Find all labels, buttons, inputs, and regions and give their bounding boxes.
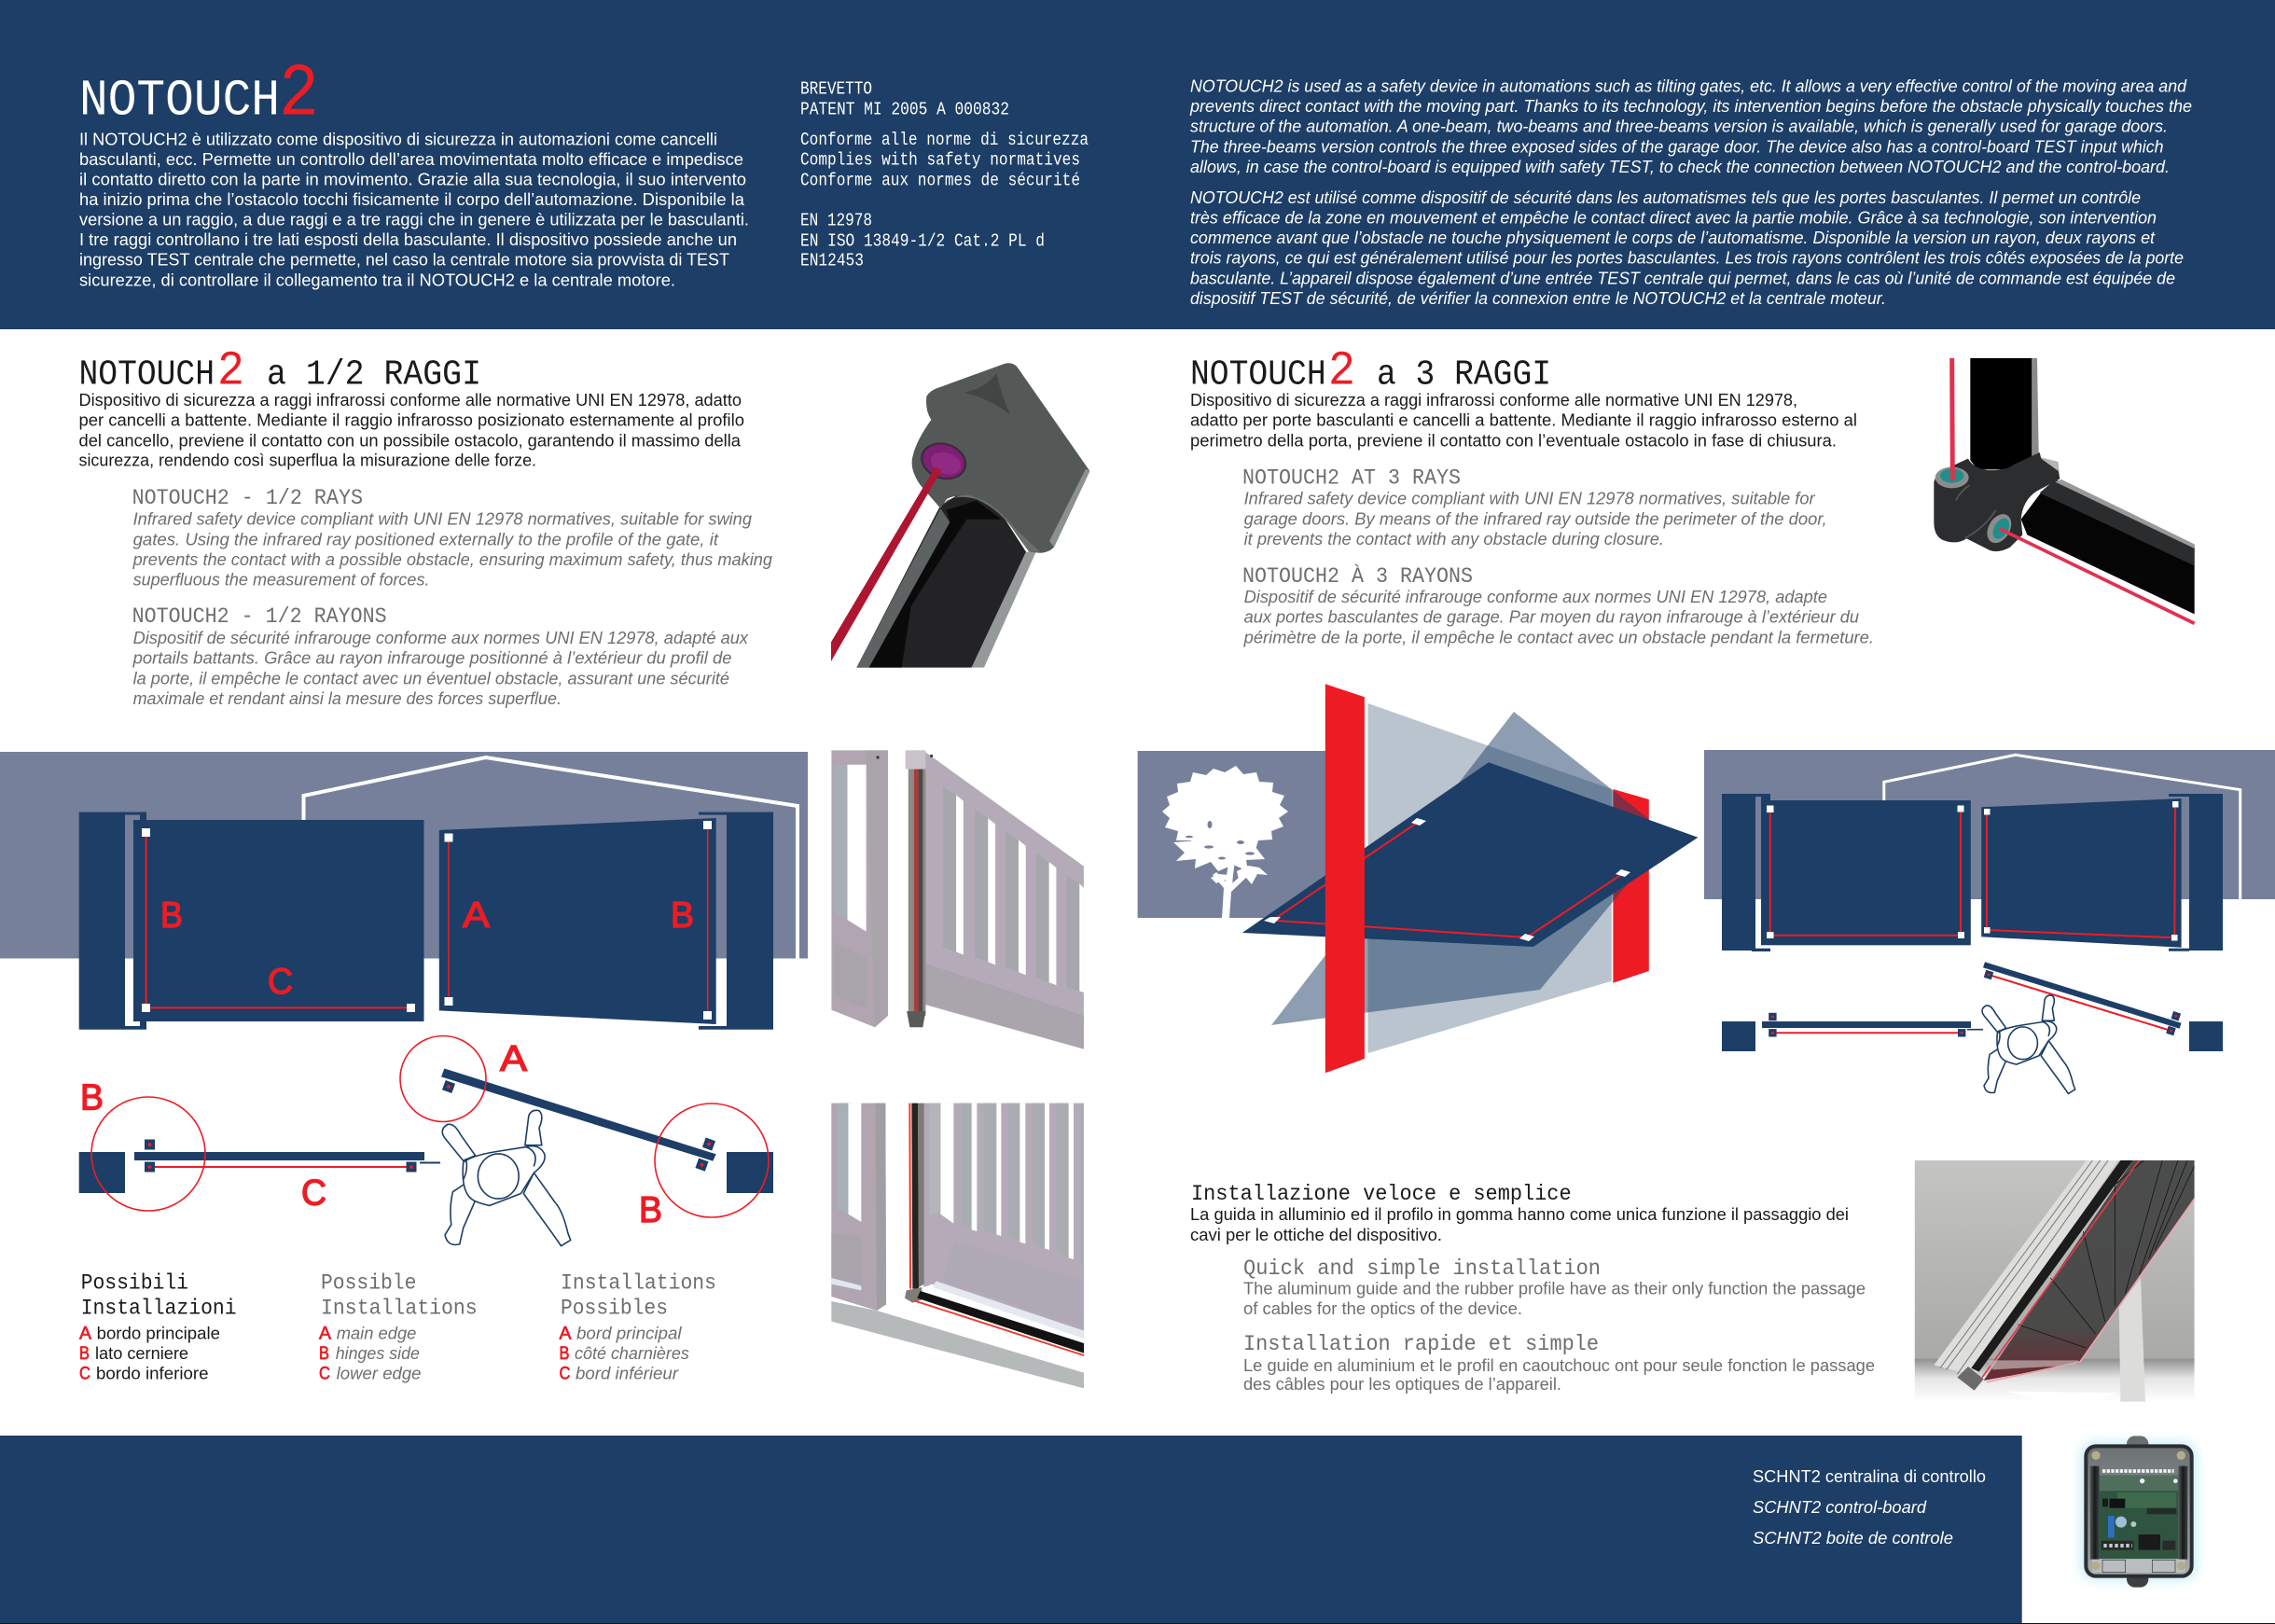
door leaf [1242, 762, 1698, 947]
text block: 1/2 rays French: Dispositif de sécurité infrarouge conforme aux normes UNI EN 12978, adapté aux [133, 628, 749, 647]
highlight circles [91, 1035, 769, 1217]
text block: 3 rays English: garage doors. By means of the infrared ray outside the perimeter of the door, [1244, 508, 1827, 528]
intro text: French [1190, 187, 2184, 308]
plan letters: B [80, 1078, 104, 1117]
intro text: English: structure of the automation. A one-beam, two-beams and three-beams version is available, which is generally used for garage doors. [1190, 117, 2168, 136]
control-board captions: SCHNT2 boite de controle [1753, 1528, 1953, 1548]
patent and norms text: Conforme aux normes de sécurité [800, 170, 1080, 190]
heading: NOTOUCH2 a 3 raggi: 2 [1328, 344, 1355, 399]
plan sensors [145, 1080, 715, 1172]
legend: French: côté charnières [575, 1343, 689, 1363]
text block: quick installation French: des câbles pour les optiques de l’appareil. [1243, 1374, 1561, 1394]
legend: English: Possible [321, 1271, 416, 1296]
legend: Italian: bordo principale [97, 1324, 220, 1343]
text block: 1/2 rays English: prevents the contact with a possible obstacle, ensuring maximum safety, thus making [132, 549, 773, 569]
legend: English: C [319, 1365, 330, 1384]
intro text: French: commence avant que l’obstacle ne touche physiquement le corps de l’automatisme. Disponible la version un rayon, deux rayons et [1190, 228, 2156, 247]
infrared beams [1952, 358, 2195, 623]
plan letters: B [639, 1190, 662, 1230]
patent and norms text: Conforme alle norme di sicurezza [800, 130, 1089, 150]
text block: 1/2 rays Italian [78, 390, 744, 470]
legend: English: B [319, 1344, 329, 1364]
text block: 3 rays French: aux portes basculantes de garage. Par moyen du rayon infrarouge à l’extérieur du [1244, 607, 1859, 627]
intro text: English: prevents direct contact with the moving part. Thanks to its technology, its intervention begins before the obstacle physically touches the [1189, 96, 2192, 116]
left post [79, 812, 146, 1030]
heading: NOTOUCH2 a 1/2 raggi [78, 344, 481, 399]
gate diagram: 1/2 rays plan view [79, 1035, 773, 1246]
far red post [1613, 789, 1649, 983]
intro text: Italian: I tre raggi controllano i tre lati esposti della basculante. Il dispositivo possiede anche un [79, 229, 737, 249]
legend: English: Installations [321, 1296, 478, 1320]
text block: 3 rays Italian [1190, 390, 1857, 450]
intro text: Italian: il contatto diretto con la parte in movimento. Grazie alla sua tecnologia, il suo intervento [79, 170, 746, 188]
text block: 1/2 rays English [132, 486, 773, 590]
text block: 1/2 rays English: Infrared safety device compliant with UNI EN 12978 normatives, suitable for swing [133, 509, 753, 529]
text block: quick installation French [1243, 1332, 1875, 1394]
text block: 3 rays Italian: adatto per porte basculanti e cancelli a battente. Mediante il raggio infrarosso esterno al [1190, 410, 1857, 430]
elevation letters: C [268, 962, 293, 1002]
patent and norms text [800, 79, 1089, 271]
right leaf rays A and B [444, 821, 712, 1020]
patent and norms text: EN12453 [800, 250, 864, 271]
heading: NOTOUCH2 a 1/2 raggi: NOTOUCH [78, 355, 215, 396]
legend: French [560, 1271, 716, 1384]
legend: Italian: bordo inferiore [96, 1364, 209, 1383]
text block: 3 rays English: NOTOUCH2 AT 3 RAYS [1242, 465, 1461, 490]
gate diagram: 1/2 rays elevation [0, 752, 808, 1030]
text block: quick installation English: of cables for the optics of the device. [1243, 1298, 1522, 1318]
product render: three-ray corner sensor [1934, 358, 2195, 623]
intro text: English: NOTOUCH2 is used as a safety device in automations such as tilting gates, etc. It allows a very effective control of the moving area and [1190, 76, 2187, 96]
text block: quick installation Italian: cavi per le ottiche del dispositivo. [1190, 1225, 1442, 1244]
side wall panel [1367, 703, 1612, 1053]
text block: 3 rays French: Dispositif de sécurité infrarouge conforme aux normes UNI EN 12978, adapte [1244, 587, 1827, 606]
legend: French: A [560, 1325, 572, 1344]
door leaves [1761, 800, 1971, 945]
plan letters [80, 1039, 662, 1230]
intro text: Italian: basculanti, ecc. Permette un controllo dell’area movimentata molto efficace e impedisce [79, 149, 743, 169]
text block: 1/2 rays French: NOTOUCH2 - 1/2 RAYONS [132, 604, 387, 629]
left leaf rays B and C [142, 828, 415, 1012]
intro text: Italian: sicurezze, di controllare il collegamento tra il NOTOUCH2 e la centrale motore. [79, 270, 675, 289]
control-board captions [1753, 1466, 1986, 1548]
posts [1722, 794, 2223, 951]
legend: French: bord principal [576, 1324, 682, 1343]
header band [0, 0, 2275, 329]
legend: English: A [319, 1325, 331, 1344]
patent and norms text: BREVETTO [800, 79, 872, 100]
legend: French: B [560, 1344, 569, 1364]
elevation letters: A [463, 895, 490, 936]
intro text: French: dispositif TEST de sécurité, de vérifier la connexion entre le NOTOUCH2 et la centrale moteur. [1190, 288, 1886, 308]
infrared beam [831, 467, 941, 661]
intro text: Italian: Il NOTOUCH2 è utilizzato come dispositivo di sicurezza in automazioni come cancelli [79, 129, 717, 148]
legend: Italian: Possibili [81, 1271, 188, 1296]
text block: 1/2 rays French: la porte, il empêche le contact avec un éventuel obstacle, assurant une sécurité [133, 668, 729, 687]
sensors [1264, 818, 1630, 941]
patent and norms text: EN ISO 13849-1/2 Cat.2 PL d [800, 230, 1045, 251]
text block: 1/2 rays Italian: Dispositivo di sicurezza a raggi infrarossi conforme alle normative UNI EN 12978, adatto [78, 390, 742, 409]
intro text: English [1189, 76, 2192, 176]
text block: 3 rays Italian: perimetro della porta, previene il contatto con l’eventuale ostacolo in fase di chiusura. [1190, 430, 1837, 450]
product render: sensor on swing gate [831, 363, 1089, 668]
intro text: Italian: ingresso TEST centrale che permette, nel caso la centrale motore sia provvista di TEST [79, 250, 729, 270]
left gate leaf [133, 820, 423, 1021]
text block: 1/2 rays English: superfluous the measurement of forces. [133, 570, 429, 590]
garage door 3D diagram [1242, 684, 1698, 1073]
text block: 3 rays English: Infrared safety device compliant with UNI EN 12978 normatives, suitable for [1244, 489, 1815, 508]
heading: NOTOUCH2 a 1/2 raggi: a 1/2 RAGGI [267, 355, 481, 396]
intro text: Italian [79, 129, 749, 289]
plan letters: A [500, 1039, 527, 1079]
photo: gate with lower ray [831, 1103, 1084, 1388]
plan letters: C [301, 1173, 326, 1214]
text block: quick installation English: The aluminum guide and the rubber profile have as their only function the passage [1243, 1278, 1866, 1298]
legend: Italian [79, 1271, 237, 1384]
photo: gate with vertical ray [831, 750, 1084, 1049]
legend: Italian: A [79, 1325, 91, 1344]
legend: French: C [560, 1365, 571, 1384]
near red post [1325, 684, 1365, 1073]
text block: 1/2 rays Italian: sicurezza, rendendo così superflua la misurazione delle forze. [78, 451, 536, 470]
text block: quick installation Italian: Installazione veloce e semplice [1191, 1182, 1572, 1206]
main title [79, 53, 319, 138]
text block: 3 rays English [1242, 465, 1827, 548]
text block: quick installation English: Quick and simple installation [1243, 1256, 1601, 1281]
text block: 3 rays French: NOTOUCH2 À 3 RAYONS [1242, 563, 1473, 589]
legend: French: bord inférieur [576, 1364, 679, 1383]
text block: 1/2 rays French: maximale et rendant ainsi la mesure des forces superflue. [133, 688, 562, 708]
text block: 3 rays Italian: Dispositivo di sicurezza a raggi infrarossi conforme alle normative UNI EN 12978, [1190, 390, 1797, 409]
person top view [1982, 995, 2075, 1093]
three rays [1272, 822, 1623, 937]
intro text: French: NOTOUCH2 est utilisé comme dispositif de sécurité dans les automatismes tels que les portes basculantes. Il permet un contrôle [1190, 187, 2141, 207]
patent and norms text: EN 12978 [800, 211, 872, 231]
lens [916, 437, 971, 485]
intro text: French: trois rayons, ce qui est généralement utilisé pour les portes basculantes. Les trois rayons contrôlent les trois côtés exposées de la porte [1190, 248, 2184, 268]
legend: Italian: C [79, 1365, 90, 1384]
garage door diagram: elevation [1704, 750, 2275, 951]
photo: SCHNT2 control board [2080, 1436, 2198, 1588]
person top view [442, 1110, 571, 1246]
intro text: English: The three-beams version controls the three exposed sides of the garage door. The device also has a control-board TEST input which [1190, 136, 2164, 156]
main title: NOTOUCH [79, 72, 280, 131]
text block: quick installation French: Le guide en aluminium et le profil en caoutchouc ont pour seule fonction le passage [1243, 1355, 1875, 1375]
patent and norms text: Complies with safety normatives [800, 150, 1080, 171]
door rays [1767, 801, 2179, 940]
legend: Italian: Installazioni [81, 1296, 237, 1320]
garage door diagram: plan view [1722, 962, 2223, 1093]
right post [699, 812, 773, 1030]
text block: 1/2 rays French [132, 604, 749, 708]
control-board captions: SCHNT2 control-board [1753, 1497, 1927, 1517]
legend: English: hinges side [336, 1343, 420, 1363]
elevation letters [160, 895, 694, 1002]
lenses [1935, 467, 2016, 548]
heading: NOTOUCH2 a 3 raggi: a 3 RAGGI [1377, 355, 1551, 396]
intro text: English: allows, in case the control-board is equipped with safety TEST, to check the connection between NOTOUCH2 and the control-board. [1190, 157, 2170, 176]
heading: NOTOUCH2 a 3 raggi: NOTOUCH [1190, 355, 1326, 396]
text block: 1/2 rays English: NOTOUCH2 - 1/2 RAYS [132, 486, 363, 510]
text block: 1/2 rays Italian: del cancello, previene il contatto con un possibile ostacolo, garantendo il massimo della [78, 430, 742, 450]
text block: 3 rays French: périmètre de la porte, il empêche le contact avec un obstacle pendant la fermeture. [1243, 627, 1874, 646]
patent and norms text: PATENT MI 2005 A 000832 [800, 99, 1009, 119]
legend: English: main edge [337, 1324, 416, 1343]
text block: 3 rays English: it prevents the contact with any obstacle during closure. [1244, 529, 1664, 548]
intro text: French: très efficace de la zone en mouvement et empêche le contact direct avec la partie mobile. Grâce à sa technologie, son intervention [1190, 208, 2157, 228]
elevation letters: B [160, 895, 183, 936]
text block: quick installation French: Installation rapide et simple [1243, 1332, 1599, 1356]
intro text: Italian: versione a un raggio, a due raggi e a tre raggi che in genere è utilizzata per le basculanti. [79, 210, 749, 229]
footer band [0, 1436, 2275, 1624]
text block: quick installation Italian: La guida in alluminio ed il profilo in gomma hanno come unica funzione il passaggio dei [1190, 1204, 1849, 1224]
plan sensors [1769, 970, 2181, 1037]
heading: NOTOUCH2 a 3 raggi [1190, 344, 1551, 399]
tree backdrop panel [1138, 751, 1326, 918]
text block: 1/2 rays Italian: per cancelli a battente. Mediante il raggio infrarosso posizionato esternamente al profilo [78, 410, 744, 430]
icon: tree [1162, 766, 1288, 918]
text block: quick installation Italian [1190, 1182, 1849, 1244]
legend: Italian: lato cerniere [95, 1343, 188, 1363]
door swing shadow [1271, 712, 1649, 1025]
legend: English [319, 1271, 478, 1384]
text block: 3 rays French [1242, 563, 1874, 646]
legend: Italian: B [79, 1344, 90, 1364]
intro text: Italian: ha inizio prima che l’ostacolo tocchi fisicamente il corpo dell’automazione. Disponibile la [79, 189, 745, 209]
text block: 1/2 rays French: portails battants. Grâce au rayon infrarouge positionné à l’extérieur du profil de [132, 648, 731, 668]
legend: English: lower edge [337, 1364, 422, 1383]
photo: garage door with rays [1915, 1160, 2195, 1402]
right gate leaf [439, 818, 716, 1024]
control-board captions: SCHNT2 centralina di controllo [1753, 1466, 1986, 1486]
intro text: French: basculante. L’appareil dispose également d’une entrée TEST centrale qui permet, dans le cas où l’unité de commande est équipée de [1190, 268, 2175, 287]
text block: 1/2 rays English: gates. Using the infrared ray positioned externally to the profile of the gate, it [133, 529, 719, 548]
heading: NOTOUCH2 a 1/2 raggi: 2 [217, 344, 244, 399]
elevation letters: B [671, 895, 694, 936]
legend: French: Possibles [561, 1296, 668, 1320]
legend: French: Installations [561, 1271, 716, 1296]
text block: quick installation English [1243, 1256, 1866, 1318]
main title: 2 [279, 53, 319, 138]
